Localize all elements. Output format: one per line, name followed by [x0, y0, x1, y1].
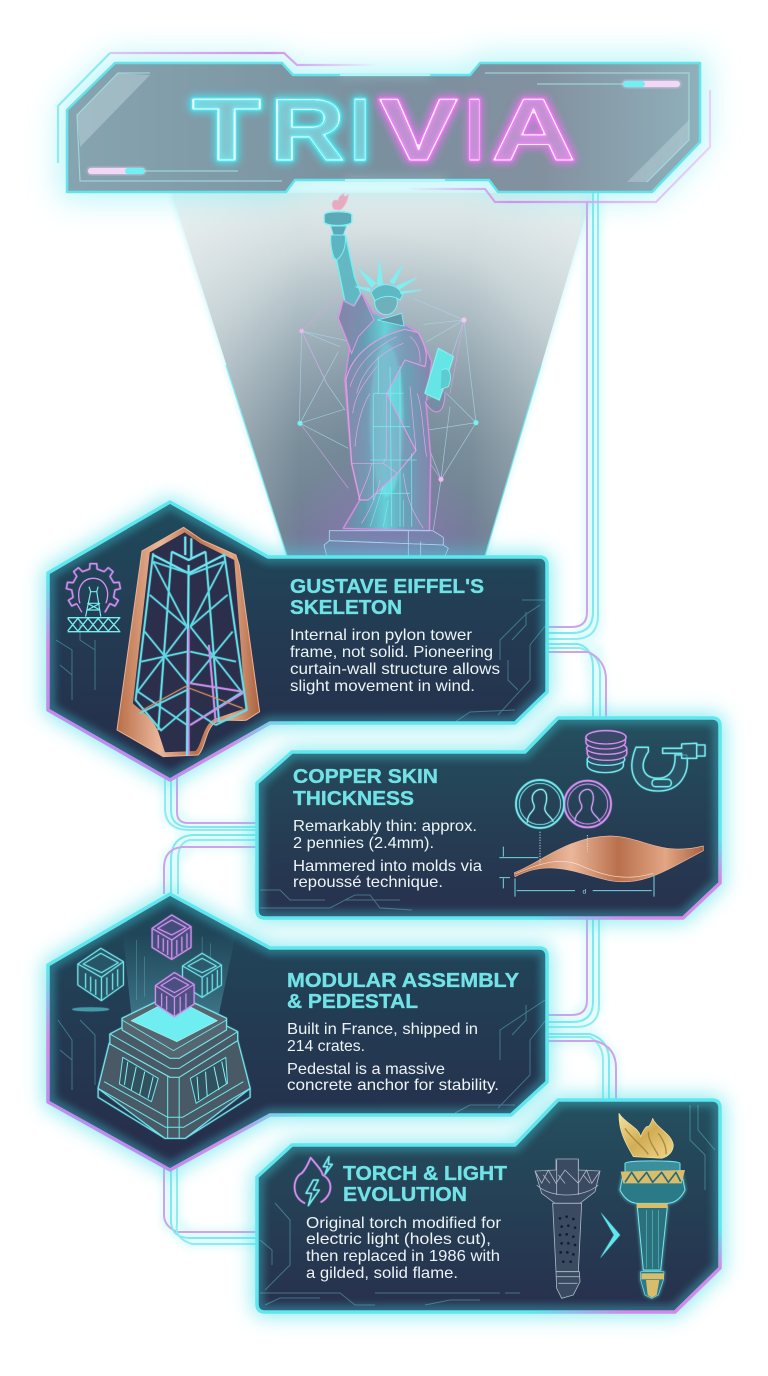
hologram light shaft: [123, 933, 236, 1013]
banner frame accents: [58, 53, 710, 202]
heading: [287, 969, 519, 1013]
icon: crate center pink: [156, 973, 194, 1017]
title text: A: [491, 80, 576, 179]
heading: & PEDESTAL: [287, 990, 418, 1013]
illustration: pedestal and crates: [72, 915, 250, 1138]
icon: original torch: [535, 1159, 600, 1298]
icon: micrometer: [632, 743, 705, 791]
heading: GUSTAVE EIFFEL'S: [290, 575, 484, 598]
circuit traces: [260, 890, 412, 910]
body text: [290, 627, 500, 695]
heading: [290, 575, 484, 619]
icon: gilded torch: [620, 1173, 685, 1298]
body text: a gilded, solid flame.: [306, 1265, 458, 1282]
illustration: copper skin over iron pylon: [117, 527, 260, 757]
illustrations: old and new torches: [535, 1113, 685, 1298]
body text: slight movement in wind.: [290, 678, 475, 695]
heading: THICKNESS: [293, 787, 414, 810]
body text: Original torch modified for: [306, 1215, 501, 1232]
heading: TORCH & LIGHT: [343, 1162, 507, 1185]
statue figure: [324, 193, 453, 531]
connectors: header to gustave eiffel panel: [548, 192, 606, 718]
icon: flame with bolts: [295, 1157, 332, 1206]
connectors: eiffel panel to copper panel: [164, 775, 258, 894]
body text: [293, 818, 482, 891]
body text: Built in France, shipped in: [287, 1021, 478, 1038]
connector lines: [164, 192, 616, 1244]
body text: [287, 1021, 499, 1094]
title text: R: [270, 80, 345, 179]
body text: then replaced in 1986 with: [306, 1248, 500, 1265]
body text: 2 pennies (2.4mm).: [293, 835, 434, 852]
icons: coins, micrometer, pennies, copper sheet: [499, 731, 705, 897]
body text: [306, 1215, 501, 1282]
panel: gustave eiffel's skeleton: [48, 502, 547, 780]
icon: gear with tower: [66, 564, 120, 632]
circuit traces: [260, 1105, 715, 1305]
panel: torch & light evolution: [257, 1100, 720, 1312]
panel: copper skin thickness: [257, 718, 720, 918]
heading: MODULAR ASSEMBLY: [287, 969, 519, 992]
title text: [192, 80, 576, 179]
banner plate: [67, 63, 700, 192]
heading: [343, 1162, 507, 1206]
icon: coin stack: [586, 731, 627, 772]
connectors: modular panel to torch panel: [164, 1168, 258, 1244]
body text: 214 crates.: [287, 1038, 365, 1055]
circuit traces: [56, 600, 546, 722]
body text: Pedestal is a massive: [287, 1061, 445, 1078]
statue pedestal: [324, 531, 448, 556]
title text: I: [465, 80, 484, 179]
panel: modular assembly & pedestal: [48, 894, 547, 1170]
icon: pennies: [516, 780, 611, 828]
icon: crate right: [183, 953, 221, 997]
heading: COPPER SKIN: [293, 765, 438, 788]
statue of liberty hologram: [298, 193, 478, 556]
icon: pedestal: [98, 993, 250, 1138]
icons: coins, micrometer, pennies, copper sheet: d: [582, 888, 586, 895]
heading: EVOLUTION: [343, 1183, 467, 1206]
body text: frame, not solid. Pioneering: [290, 644, 493, 661]
body text: concrete anchor for stability.: [287, 1077, 499, 1094]
network constellation: [298, 293, 478, 530]
banner highlights: [77, 73, 689, 182]
body text: electric light (holes cut),: [306, 1231, 491, 1248]
title text: T: [192, 80, 261, 179]
title banner: [58, 53, 710, 202]
body text: Hammered into molds via: [293, 858, 482, 875]
heading: [293, 765, 438, 810]
body text: repoussé technique.: [293, 874, 443, 891]
title text: I: [350, 80, 370, 179]
heading: SKELETON: [290, 596, 402, 619]
hologram light beam: [172, 193, 592, 556]
icon: crate left: [78, 948, 123, 1001]
icon: crate top pink: [152, 915, 191, 959]
title text: V: [379, 80, 458, 179]
arrow: [600, 1212, 620, 1258]
circuit traces: [58, 1000, 546, 1113]
icon: copper sheet with dimensions: [514, 836, 703, 882]
body text: Internal iron pylon tower: [290, 627, 472, 644]
body text: curtain-wall structure allows: [290, 661, 500, 678]
connectors: copper panel to modular panel: [548, 918, 616, 1100]
body text: Remarkably thin: approx.: [293, 818, 477, 835]
